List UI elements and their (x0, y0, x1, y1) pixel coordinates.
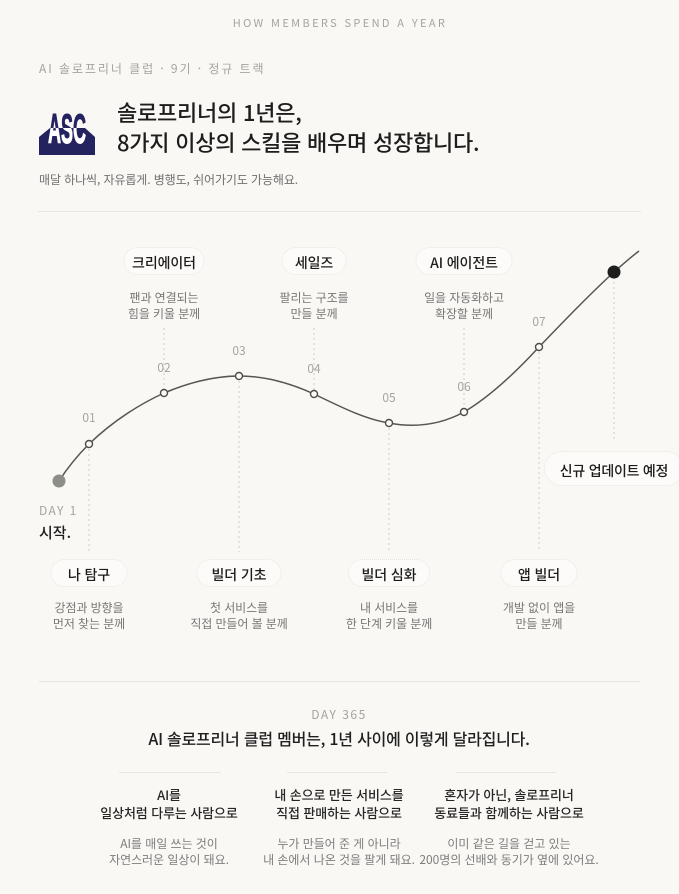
subtitle: 매달 하나씩, 자유롭게. 병행도, 쉬어가기도 가능해요. (39, 171, 298, 188)
lower step: builder advanced: 내 서비스를 (360, 599, 418, 616)
icon: ASC logo (39, 110, 95, 155)
title: 솔로프리너의 1년은, (117, 96, 302, 128)
lower step: self discovery (50, 559, 128, 632)
upper step: creator: 팬과 연결되는 (130, 289, 198, 306)
upcoming update pill (544, 451, 679, 486)
lower step: builder advanced: 빌더 심화 (362, 565, 416, 585)
outcome column 1: 일상처럼 다루는 사람으로 (100, 803, 238, 822)
outcome column 3 (419, 772, 599, 868)
lower step: self discovery: 강점과 방향을 (55, 599, 123, 616)
step numbers: 06 (457, 378, 471, 395)
step numbers: 02 (157, 359, 171, 376)
step numbers: 05 (382, 389, 396, 406)
outcome column 3: 200명의 선배와 동기가 옆에 있어요. (419, 851, 599, 868)
title: 8가지 이상의 스킬을 배우며 성장합니다. (117, 126, 479, 158)
outcome column 3: 이미 같은 길을 걷고 있는 (447, 835, 571, 852)
upper step: sales: 팔리는 구조를 (280, 289, 348, 306)
cohort label: AI 솔로프리너 클럽 · 9기 · 정규 트랙 (39, 60, 266, 77)
lower step: app builder: 만들 분께 (515, 615, 563, 632)
upper step: sales: 만들 분께 (290, 305, 338, 322)
upper step: creator (124, 247, 204, 322)
outcome column 3: 동료들과 함께하는 사람으로 (434, 803, 584, 822)
step numbers: 04 (307, 360, 321, 377)
outcome column 1: AI를 매일 쓰는 것이 (120, 835, 218, 852)
day 365 label: DAY 365 (311, 706, 367, 723)
outcome column 2: 직접 판매하는 사람으로 (276, 803, 402, 822)
title (117, 96, 479, 158)
start label (39, 502, 78, 543)
lower step: builder basics: 직접 만들어 볼 분께 (190, 615, 288, 632)
outcome column 3: 혼자가 아닌, 솔로프리너 (444, 785, 574, 804)
outcome column 1 (100, 772, 238, 868)
lower step: builder basics (190, 559, 288, 632)
lower step: self discovery: 먼저 찾는 분께 (53, 615, 125, 632)
upper step: sales (280, 247, 348, 322)
outcome column 2: 내 손으로 만든 서비스를 (274, 785, 404, 804)
upper step: AI agent: 확장할 분께 (435, 305, 493, 322)
top eyebrow: HOW MEMBERS SPEND A YEAR (233, 15, 447, 31)
upcoming update pill: 신규 업데이트 예정 (560, 461, 668, 481)
outcome column 1: AI를 (157, 785, 181, 804)
upper step: AI agent: 일을 자동화하고 (424, 289, 504, 306)
lower step: builder advanced: 한 단계 키울 분께 (346, 615, 432, 632)
lower step: builder basics: 첫 서비스를 (210, 599, 268, 616)
outcome column 2: 내 손에서 나온 것을 팔게 돼요. (263, 851, 415, 868)
upper step: sales: 세일즈 (295, 253, 333, 273)
upper step: creator: 힘을 키울 분께 (128, 305, 200, 322)
lower step: self discovery: 나 탐구 (68, 565, 110, 585)
lower step: app builder: 개발 없이 앱을 (503, 599, 575, 616)
upper step: creator: 크리에이터 (132, 253, 196, 273)
outcome column 1: 자연스러운 일상이 돼요. (109, 851, 229, 868)
upper step: AI agent (416, 247, 512, 322)
lower step: app builder: 앱 빌더 (518, 565, 560, 585)
start label: DAY 1 (39, 502, 78, 519)
start label: 시작. (39, 522, 71, 543)
lower step: app builder (500, 559, 578, 632)
outcome column 2: 누가 만들어 준 게 아니라 (277, 835, 401, 852)
step numbers: 01 (82, 409, 96, 426)
lower step: builder advanced (346, 559, 432, 632)
outcome column 2 (263, 772, 415, 868)
step numbers: 07 (532, 313, 546, 330)
section heading: AI 솔로프리너 클럽 멤버는, 1년 사이에 이렇게 달라집니다. (148, 726, 530, 750)
lower step: builder basics: 빌더 기초 (212, 565, 266, 585)
step numbers: 03 (232, 342, 246, 359)
upper step: AI agent: AI 에이전트 (430, 253, 498, 273)
